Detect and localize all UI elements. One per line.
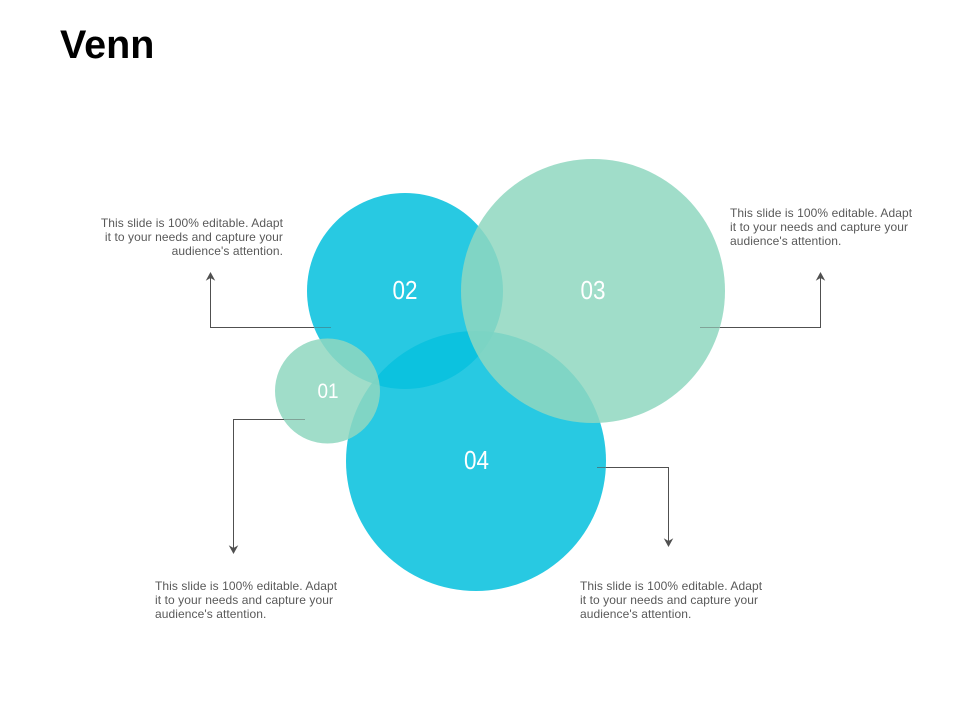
text block: top right [730,206,912,248]
label 02: 02 [392,275,418,305]
text block: bottom right: it to your needs and capture your [580,593,758,607]
text block: top left: This slide is 100% editable. Adapt [101,216,283,230]
text block: top left: audience's attention. [172,244,283,258]
arrow from circle 04 [597,468,672,546]
circle 04 [346,331,606,591]
text block: bottom left: it to your needs and capture your [155,593,333,607]
arrow from circle 03 [700,273,824,328]
text block: bottom right [580,579,762,621]
label 04: 04 [464,445,489,475]
circle 01 [275,338,380,444]
text block: top right: This slide is 100% editable. Adapt [730,206,912,220]
text block: top left: it to your needs and capture your [105,230,283,244]
text block: bottom left: This slide is 100% editable. Adapt [155,579,337,593]
label 03: 03 [580,275,606,305]
text block: bottom left: audience's attention. [155,607,266,621]
arrow from circle 01 [230,420,305,553]
text block: top left [101,216,283,258]
circle 02 [307,193,503,389]
arrow from circle 02 [207,273,331,328]
text block: bottom right: This slide is 100% editable. Adapt [580,579,762,593]
label 01: 01 [318,380,338,403]
text block: top right: it to your needs and capture your [730,220,908,234]
text block: bottom left [155,579,337,621]
title: Venn [60,23,154,67]
circle 03 [461,159,725,423]
text block: bottom right: audience's attention. [580,607,691,621]
text block: top right: audience's attention. [730,234,841,248]
